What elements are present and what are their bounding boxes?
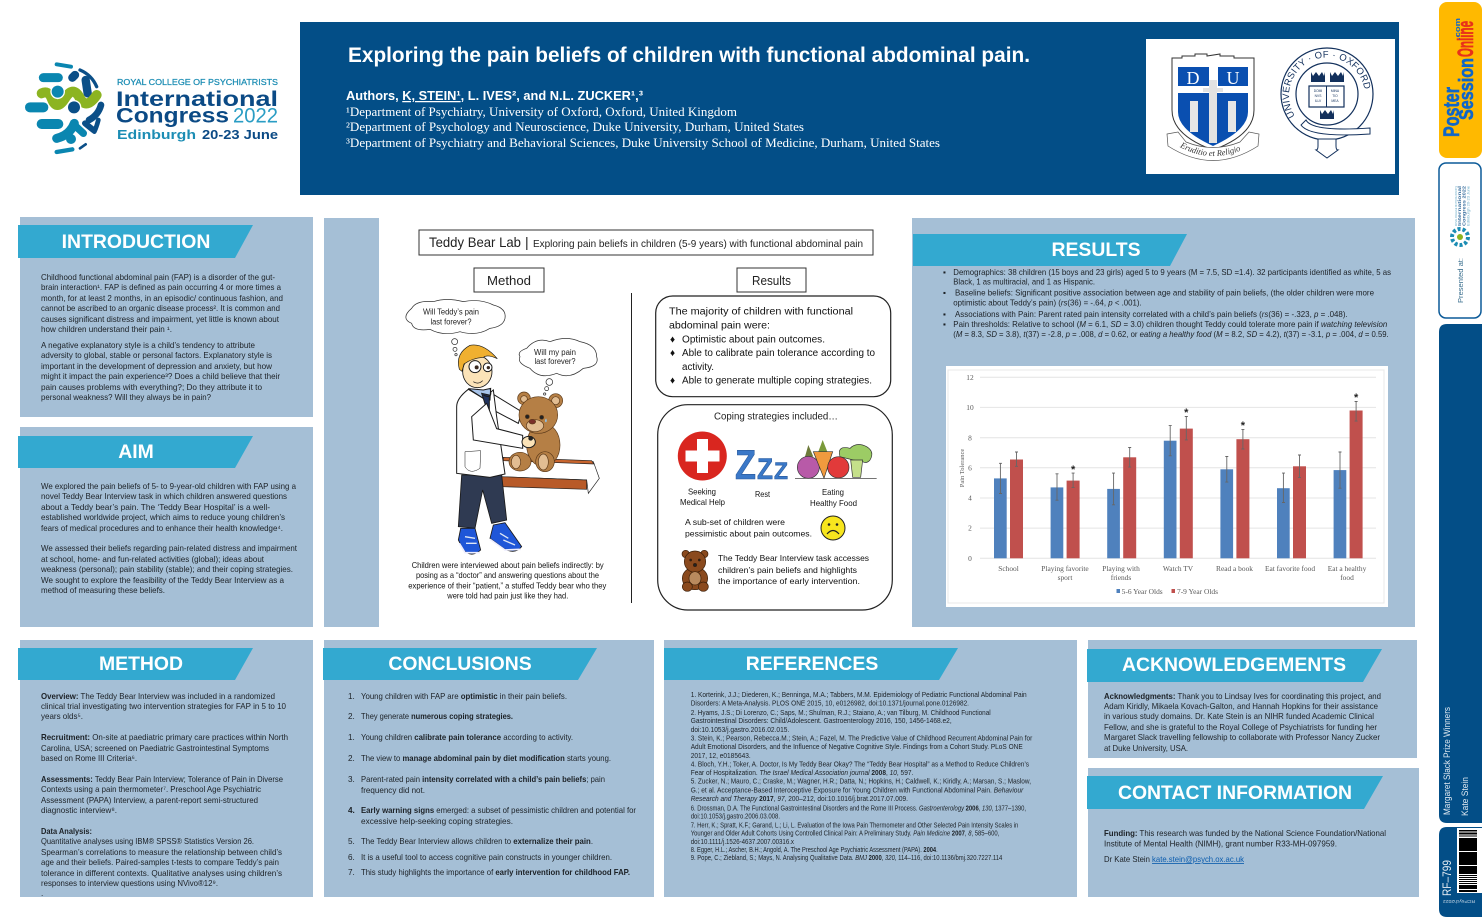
- method caption: experience of their “patient,” a stuffed Teddy bear who they: [408, 582, 607, 590]
- text: conclusions list: 2.: [348, 754, 355, 763]
- authors: Authors, K, STEIN¹, L. IVES², and N.L. ZUCKER¹,³: [346, 89, 643, 103]
- side tab: presented at: Presented at:: [1456, 258, 1465, 303]
- text: reference list: 3. Stein, K.; Pearson, Rebecca.M.; Stein, A.; Fazel, M. The Predictive Value of Childhood Recurrent Abdominal Pain for: [691, 734, 1033, 743]
- heading: conclusions: CONCLUSIONS: [388, 653, 532, 675]
- panel: conclusions: [323, 640, 654, 897]
- text: results bullets: ▪: [943, 320, 946, 329]
- text: funding and contact: Dr Kate Stein kate.stein@psych.ox.ac.uk: [1104, 855, 1245, 864]
- side tab: poster session online: Session: [1456, 58, 1478, 120]
- chart legend: 5-6 Year Olds: [1122, 587, 1163, 596]
- logo text: Edinburgh: [117, 128, 196, 142]
- text: reference list: doi:10.1053/j.gastro.2006.03.008.: [691, 812, 780, 821]
- method caption: posing as a “doctor” and answering questions about the: [416, 571, 599, 580]
- y axis labels: 0: [968, 554, 972, 563]
- text: reference list: Adult Emotional Disorders, and the Influence of Negative Cognitive Style. Findings from a Cohort Study. PLoS ONE: [691, 742, 1023, 751]
- text: introduction body: A negative explanatory style is a child’s tendency to attribute: [41, 341, 255, 350]
- panel: aim: [18, 427, 313, 627]
- icon: Duke shield: [1166, 53, 1260, 161]
- side tab: prize winners: Kate Stein: [1460, 777, 1471, 816]
- side tab: poster session online: .com: [1455, 18, 1462, 40]
- text: aim body: weakness (personal); pain stability (stable); and their coping strategies.: [40, 565, 293, 574]
- bars: 7-9 year olds: [1010, 410, 1363, 558]
- chart legend: [1116, 587, 1218, 596]
- side tab: prize winners: Margaret Slack Prize Winners: [1442, 707, 1453, 815]
- side tab: barcode id: RCPsych2022: [1442, 899, 1475, 904]
- text: aim body: novel Teddy Bear Interview task in which children answered questions: [41, 492, 287, 501]
- text: acknowledgements body: [1104, 692, 1381, 753]
- logo text: Congress: [116, 104, 229, 128]
- bars: 5-6 year olds: [994, 441, 1346, 558]
- text: reference list: 1. Korterink, J.J.; Diederen, K.; Benninga, M.A.; Tabbers, M.M. Epidemiology of Pediatric Functional Abdominal Pain: [691, 690, 1027, 699]
- text: conclusions list: frequency did not.: [361, 786, 425, 795]
- text: results bullets: ▪: [943, 289, 946, 298]
- heading: aim: [18, 436, 253, 468]
- text: method body: Assessments: Teddy Bear Pain Interview; Tolerance of Pain in Diverse: [41, 775, 283, 784]
- text: results bullets: Demographics: 38 children (15 boys and 23 girls) aged 5 to 9 years (M = 7.5, SD =1.4). 32 participants identified as white, 5 as: [953, 268, 1391, 277]
- significance stars: *: [1241, 420, 1246, 432]
- text: conclusions list: Early warning signs emerged: a subset of pessimistic children and potential for: [361, 806, 636, 815]
- text: introduction body: [41, 273, 283, 402]
- text: introduction body: cannot be ascribed to an organic disease process². It is common and: [41, 304, 280, 313]
- teddy bear patient: [509, 392, 563, 472]
- heading: contact information: [1087, 776, 1383, 809]
- text: introduction body: Childhood functional abdominal pain (FAP) is a disorder of the gut-: [41, 273, 275, 282]
- text: acknowledgements body: Margaret Slack travelling fellowship to collaborate with Professor Nancy Zucker: [1104, 733, 1380, 742]
- heading: references: [664, 648, 958, 680]
- text: introduction body: pain causes problems with everything?; Do they attribute it to: [41, 383, 262, 392]
- thought bubble: bear: [519, 338, 597, 395]
- heading: results: RESULTS: [1051, 239, 1141, 261]
- heading: conclusions: [323, 648, 597, 680]
- significance stars: *: [1071, 464, 1076, 476]
- coping labels: Seeking: [688, 488, 716, 496]
- icon: zzz: Z: [735, 441, 756, 488]
- coping strategies box: [658, 405, 892, 610]
- panel: blank centre strip: [324, 218, 379, 627]
- text: method body: [41, 692, 288, 898]
- text: conclusions list: 5.: [348, 837, 355, 846]
- text: reference list: Fear of Hospitalization. The Israel Medical Association journal 2008, 10, 597.: [691, 768, 913, 777]
- coping strategies box: Coping strategies included…: [714, 412, 838, 422]
- heading: aim: AIM: [118, 441, 154, 463]
- y axis labels: [959, 373, 974, 563]
- heading: acknowledgements: [1087, 649, 1382, 682]
- text: reference list: doi:10.1111/j.1526-4637.2007.00316.x: [691, 837, 794, 846]
- figure title box: |: [525, 234, 529, 250]
- text: conclusions list: 6.: [348, 853, 355, 862]
- text: reference list: 8. Egger, H.L.; Ascher, B.H.; Angold, A. The Preschool Age Psychiatric Assessment (PAPA). 2004.: [691, 845, 938, 854]
- side tab: poster session online: Poster: [1439, 87, 1464, 137]
- results summary box: Able to generate multiple coping strategies.: [682, 376, 872, 386]
- logo text: International: [116, 88, 278, 111]
- text: introduction body: causes significant distress and impairment, yet little is known about: [41, 315, 280, 324]
- text: conclusions list: 1.: [348, 733, 355, 742]
- results label: Results: [752, 274, 791, 288]
- thought text: doctor: last forever?: [430, 318, 472, 326]
- text: introduction body: adversity to global, stable or personal factors. Explanatory style is: [41, 351, 272, 360]
- heading: references: REFERENCES: [746, 653, 878, 675]
- text: funding and contact: [1104, 829, 1386, 864]
- coping labels: Eating: [822, 488, 844, 497]
- icon: Oxford crest: TIO: [1332, 94, 1338, 98]
- results summary box: ♦: [670, 376, 675, 386]
- text: results bullets: ▪: [943, 268, 946, 277]
- panel: acknowledgements: [1087, 640, 1417, 758]
- text: results bullets: [943, 268, 1391, 339]
- side tab: barcode id: [1439, 827, 1482, 917]
- text: method body: Assessment (PAPA) Interview, a parent-report semi-structured: [41, 796, 258, 805]
- method label: [474, 268, 544, 292]
- text: conclusions list: 1.: [348, 692, 355, 701]
- doctor coat: [457, 345, 522, 477]
- heading: method: METHOD: [99, 653, 183, 675]
- icon: Oxford crest: DOMI: [1314, 89, 1322, 93]
- text: conclusions list: excessive help-seeking coping strategies.: [361, 817, 513, 826]
- text: reference list: doi:10.1053/j.gastro.2016.02.015.: [691, 725, 789, 734]
- pessimism note: pessimistic about pain outcomes.: [685, 530, 812, 538]
- icon: zzz: Z: [757, 453, 773, 486]
- category labels: Playing with: [1102, 564, 1140, 573]
- text: reference list: [691, 690, 1033, 862]
- text: conclusions list: 7.: [348, 868, 355, 877]
- university logos box: [1146, 39, 1395, 174]
- text: reference list: 2017, 12, e0185643.: [691, 751, 751, 760]
- icon: Oxford crest: NVS: [1315, 94, 1322, 98]
- results summary box: ♦: [670, 348, 675, 359]
- text: method body: years olds⁵.: [41, 712, 83, 721]
- heading: introduction: INTRODUCTION: [62, 231, 210, 253]
- text: results bullets: (M = 8.3, SD = 3.8), t(37) = -2.8, p = .008, d = 0.62, or eating a healthy food (M = 8.2, SD = 4.2), t(37) = -3.1, p = .004, d = 0.59.: [953, 330, 1389, 339]
- coping labels: Rest: [755, 490, 771, 499]
- text: acknowledgements body: Acknowledgments: Thank you to Lindsay Ives for coordinating this project, and: [1104, 692, 1381, 701]
- text: acknowledgements body: in various study domains. Dr. Kate Stein is an NIHR funded Academic Clinical: [1104, 712, 1374, 721]
- side tab: presented at: International: [1457, 186, 1462, 226]
- category labels: Eat a healthy: [1328, 564, 1367, 573]
- logo text: 2022: [233, 104, 278, 128]
- method label: Method: [487, 274, 531, 288]
- heading: introduction: [18, 225, 253, 258]
- heading: acknowledgements: ACKNOWLEDGEMENTS: [1122, 654, 1346, 676]
- icon: small teddy bear: [682, 550, 708, 591]
- text: introduction body: month, for at least 2 months, in an episodic/ continuous fashion, and: [41, 294, 283, 303]
- text: conclusions list: This study highlights the importance of early intervention for childhood FAP.: [361, 868, 630, 877]
- header banner: [300, 22, 1399, 195]
- text: reference list: 6. Drossman, D.A. The Functional Gastrointestinal Disorders and the Rome III Process. Gastroenterology 2006, 130, 1377–1390,: [691, 803, 1026, 812]
- text: funding and contact: Institute of Mental Health (NIMH), grant number R33-MH-097959.: [1104, 840, 1337, 848]
- y axis labels: Pain Tolerance: [959, 449, 966, 487]
- method caption: were told had pain just like they had.: [446, 592, 568, 600]
- text: acknowledgements body: Adam Kiridly, Mikaela Kovach-Galton, and Hannah Hopkins for their assistance: [1104, 702, 1378, 711]
- text: reference list: 2. Hyams, J.S.; Di Lorenzo, C.; Saps, M.; Shulman, R.J.; Staiano, A.; van Tilburg, M. Childhood Functional: [691, 708, 991, 717]
- pessimism note: A sub-set of children were: [685, 518, 785, 527]
- method caption: [408, 561, 607, 600]
- heading: method: [18, 648, 253, 680]
- text: introduction body: might it impact the pain experience³? Does a child believe that their: [41, 372, 280, 381]
- category labels: Playing favorite: [1041, 564, 1089, 573]
- figure title box: Teddy Bear Lab: [429, 234, 521, 250]
- doctor legs and shoes: [458, 475, 522, 554]
- text: method body: Contexts using a pain thermometer⁷. Preschool Age Psychiatric: [41, 785, 261, 794]
- thought text: bear: Will my pain: [534, 348, 576, 357]
- icon: Duke shield: D: [1186, 68, 1200, 88]
- coping labels: [680, 488, 857, 508]
- logo text: [116, 77, 278, 142]
- side tab: barcode id: RF–799: [1440, 860, 1454, 896]
- side tab: presented at: ROYAL COLLEGE OF PSYCHIATRISTS: [1454, 186, 1458, 226]
- text: aim body: method of measuring these beliefs.: [41, 586, 165, 595]
- text: reference list: Disorders: A Meta-Analysis. PLOS ONE 2015, 10, e0126982, doi:10.1371/journal.pone.0126982.: [691, 699, 969, 708]
- results summary box: [656, 296, 891, 397]
- panel: contact information: [1087, 768, 1419, 897]
- error bars: [999, 402, 1358, 505]
- teddy interview note: [718, 554, 869, 586]
- text: conclusions list: Parent-rated pain intensity correlated with a child’s pain beliefs; pain: [361, 775, 605, 784]
- thought text: doctor: [423, 308, 479, 326]
- text: conclusions list: Young children with FAP are optimistic in their pain beliefs.: [361, 692, 567, 701]
- text: method body: clinical trial investigating two intervention strategies for FAP in 5 to 10: [41, 702, 286, 711]
- significance stars: *: [1354, 392, 1359, 404]
- y axis labels: 2: [968, 524, 972, 533]
- icon: Oxford crest: [1280, 47, 1374, 159]
- text: method body: .: [41, 889, 43, 898]
- poster title: Exploring the pain beliefs of children with functional abdominal pain.: [348, 44, 1030, 67]
- text: method body: Data Analysis:: [41, 827, 92, 836]
- category labels: food: [1340, 573, 1354, 582]
- results summary box: The majority of children with functional: [669, 306, 853, 318]
- results summary box: ♦: [670, 334, 675, 346]
- text: conclusions list: The Teddy Bear Interview allows children to externalize their pain.: [361, 837, 593, 846]
- heading: contact information: CONTACT INFORMATION: [1118, 782, 1352, 804]
- thought bubble: doctor: [406, 299, 505, 356]
- category labels: sport: [1058, 573, 1073, 582]
- text: method body: based on Rome III Criteria⁶.: [41, 754, 137, 763]
- text: method body: age and their beliefs. Paired-samples t-tests to compare Teddy’s pain: [41, 858, 279, 867]
- text: conclusions list: 4.: [348, 806, 355, 815]
- y axis labels: 4: [968, 494, 972, 503]
- y axis labels: 10: [966, 403, 974, 412]
- panel: references: [664, 640, 1077, 897]
- logo text: 20-23 June: [202, 128, 278, 142]
- text: results bullets: optimistic about Teddy’s pain) (rs(36) = -.64, p < .001).: [953, 299, 1142, 308]
- text: introduction body: brain interaction¹. FAP is defined as pain occurring 4 or more times a: [41, 283, 281, 292]
- icon: Oxford crest: UNIVERSITY · OF · OXFORD: [1282, 51, 1370, 118]
- coping labels: Medical Help: [680, 498, 725, 507]
- text: aim body: We sought to explore the feasibility of the Teddy Bear Interview as a: [41, 576, 284, 585]
- icon: medical cross: [678, 432, 727, 480]
- results summary box: activity.: [682, 362, 714, 373]
- pessimism note: [685, 518, 812, 538]
- icon: Oxford crest: ILLV: [1315, 99, 1322, 103]
- text: reference list: 7. Herr, K.; Spratt, K.F.; Garand, L.; Li, L. Evaluation of the Iowa Pain Thermometer and Other Selected Pain Intensity Scales in: [691, 820, 1018, 829]
- y axis labels: 6: [968, 463, 972, 472]
- illustration: doctor and teddy bear: [457, 345, 599, 554]
- text: introduction body: important in the development of depression and anxiety, but how: [41, 362, 272, 371]
- text: method body: Recruitment: On-site at paediatric primary care practices within North: [41, 733, 288, 742]
- text: reference list: Younger and Older Adult Cohorts Using Controlled Clinical Pain: A Preliminary Study. Pain Medicine 2007, 8, 585–600,: [691, 828, 999, 837]
- text: conclusions list: 2.: [348, 712, 355, 721]
- icon: Oxford crest: MINA: [1331, 89, 1340, 93]
- congress logo: [30, 64, 278, 152]
- text: acknowledgements body: at Duke University, USA.: [1104, 744, 1188, 753]
- text: reference list: 5. Zucker, N.; Mauro, C.; Craske, M.; Wagner, H.R.; Datta, N.; Hopkins, H.; Caldwell, K.; Kiridly, A.; Marsan, S.; Maslow,: [691, 777, 1031, 786]
- thought text: bear: last forever?: [534, 357, 576, 366]
- side tab: presented at: Congress 2022: [1462, 185, 1466, 226]
- panel: results: [912, 218, 1415, 627]
- side tab: presented at: [1439, 163, 1481, 318]
- logo mark: [30, 64, 101, 152]
- category labels: [998, 564, 1367, 582]
- text: reference list: 4. Bloch, Y.H.; Toker, A. Doctor, Is My Teddy Bear Okay? The “Teddy Bear Hospital” as a Method to Reduce Children’s: [691, 760, 1029, 769]
- text: method body: diagnostic interview⁸.: [41, 806, 117, 815]
- results summary box: Optimistic about pain outcomes.: [682, 334, 825, 346]
- icon: Oxford crest: MEA: [1331, 99, 1339, 103]
- text: aim body: established worldwide project, which aims to reduce young children’s: [41, 513, 285, 522]
- text: results bullets: Pain thresholds: Relative to school (M = 6.1, SD = 3.0) children thought Teddy could tolerate more pain if watching television: [953, 320, 1388, 329]
- examination table: [502, 457, 599, 493]
- affiliations: ²Department of Psychology and Neuroscience, Duke University, Durham, United States: [346, 120, 804, 134]
- icon: zzz: [735, 441, 788, 488]
- category labels: School: [998, 564, 1019, 573]
- text: aim body: We assessed their beliefs regarding pain-related distress and impairment: [41, 544, 298, 553]
- text: aim body: [40, 482, 298, 595]
- category labels: friends: [1111, 573, 1131, 582]
- icon: Duke shield: Eruditio et Religio: [1180, 142, 1240, 156]
- side tab: presented at: Edinburgh 20-23 June: [1466, 186, 1470, 226]
- text: reference list: Research and Therapy 2017, 97, 200–212, doi:10.1016/j.brat.2017.07.009.: [691, 794, 908, 803]
- results summary box: Able to calibrate pain tolerance according to: [682, 348, 875, 359]
- doctor forearm and hand: [472, 403, 535, 448]
- text: method body: Spearman’s correlations to measure the relationship between child’s: [41, 848, 282, 857]
- heading: results: [913, 234, 1187, 266]
- text: reference list: 9. Pope, C.; Ziebland, S.; Mays, N. Analysing Qualitative Data. BMJ 2000, 320, 114–116, doi:10.1136/bmj.320.7227.114: [691, 853, 1002, 862]
- text: method body: responses to interview questions using NVivo®12⁹.: [41, 879, 218, 888]
- affiliations: ¹Department of Psychiatry, University of Oxford, Oxford, United Kingdom: [346, 105, 737, 119]
- figure title box: [419, 230, 873, 255]
- text: aim body: We explored the pain beliefs of 5- to 9-year-old children with FAP using a: [41, 482, 296, 491]
- text: results bullets: Black, 1 as multiracial, and 1 as Hispanic.: [953, 278, 1095, 287]
- text: conclusions list: It is a useful tool to access cognitive pain constructs in younger children.: [361, 853, 612, 862]
- text: method body: Overview: The Teddy Bear Interview was included in a randomized: [41, 692, 275, 701]
- text: funding and contact: Funding: This research was funded by the National Science Foundation/National: [1104, 829, 1386, 838]
- category labels: Eat favorite food: [1265, 564, 1315, 573]
- category labels: Read a book: [1216, 564, 1253, 573]
- category labels: Watch TV: [1163, 564, 1194, 573]
- y axis labels: 12: [966, 373, 974, 382]
- text: introduction body: how children understand their pain ¹.: [41, 325, 172, 334]
- chart legend: 7-9 Year Olds: [1177, 587, 1218, 596]
- y axis labels: 8: [968, 433, 972, 442]
- text: conclusions list: [348, 692, 636, 877]
- method caption: Children were interviewed about pain beliefs indirectly: by: [412, 561, 605, 570]
- text: aim body: fears of medical procedures and to enhance their health knowledge⁴.: [41, 524, 283, 533]
- side tab: poster session online: [1439, 2, 1482, 158]
- text: reference list: Gastrointestinal Disorders: Child/Adolescent. Gastroenterology 2016, 150, 1456-1468.e2,: [691, 716, 952, 725]
- icon: sad face: [821, 516, 845, 540]
- text: reference list: G.; et al. Acceptance-Based Interoceptive Exposure for Young Children with Functional Abdominal Pain. Behaviour: [691, 786, 1024, 795]
- text: results bullets: Baseline beliefs: Significant positive association between age and stability of pain beliefs, (the older children were more: [955, 289, 1374, 298]
- side tab: prize winners: [1439, 324, 1482, 823]
- significance stars: [1071, 392, 1359, 476]
- text: method body: Carolina, USA; screened on Paediatric Gastrointestinal Symptoms: [41, 744, 269, 753]
- significance stars: *: [1184, 407, 1189, 419]
- icon: zzz: Z: [774, 458, 788, 485]
- figure title box: Exploring pain beliefs in children (5-9 years) with functional abdominal pain: [533, 238, 863, 250]
- panel: introduction: [18, 217, 313, 417]
- thought text: bear: [534, 348, 576, 366]
- text: results bullets: Associations with Pain: Parent rated pain intensity correlated with a child’s pain beliefs (rs(36) = -.323, p = .048).: [955, 310, 1348, 319]
- teddy interview note: The Teddy Bear Interview task accesses: [718, 554, 869, 563]
- text: aim body: at school, home- and fun-related activities (global); ideas about: [41, 555, 265, 564]
- text: introduction body: personal weakness? Will they always be in pain?: [41, 393, 211, 402]
- text: results bullets: ▪: [943, 310, 946, 319]
- text: aim body: about a Teddy bear’s pain. The ‘Teddy Bear Hospital’ is a well-: [41, 503, 270, 512]
- text: conclusions list: Young children calibrate pain tolerance according to activity.: [361, 733, 573, 742]
- text: acknowledgements body: Fellow, and she is grateful to the Royal College of Psychiatrists for funding her: [1104, 723, 1377, 732]
- text: conclusions list: They generate numerous coping strategies.: [361, 712, 513, 721]
- logo text: ROYAL COLLEGE OF PSYCHIATRISTS: [117, 77, 278, 87]
- results summary box: abdominal pain were:: [669, 320, 770, 332]
- affiliations: [346, 105, 940, 150]
- text: conclusions list: 3.: [348, 775, 355, 784]
- panel: teddy bear lab figure: [406, 230, 892, 610]
- teddy interview note: children’s pain beliefs and highlights: [718, 566, 857, 575]
- text: method body: Quantitative analyses using IBM® SPSS® Statistics Version 26.: [41, 837, 254, 846]
- teddy interview note: the importance of early intervention.: [718, 577, 860, 586]
- icon: Duke shield: U: [1226, 68, 1240, 88]
- icon: vegetables: [795, 440, 877, 478]
- thought text: doctor: Will Teddy’s pain: [423, 308, 479, 316]
- results label: [737, 268, 806, 292]
- text: conclusions list: The view to manage abdominal pain by diet modification starts young.: [361, 754, 611, 763]
- affiliations: ³Department of Psychiatry and Behavioral Sciences, Duke University School of Medicine, Durham, United States: [346, 136, 940, 150]
- text: method body: tolerance in different contexts. Qualitative analyses using children’s: [41, 869, 282, 878]
- panel: method: [18, 640, 313, 898]
- coping labels: Healthy Food: [810, 499, 857, 508]
- bar chart: pain tolerance: [946, 366, 1388, 607]
